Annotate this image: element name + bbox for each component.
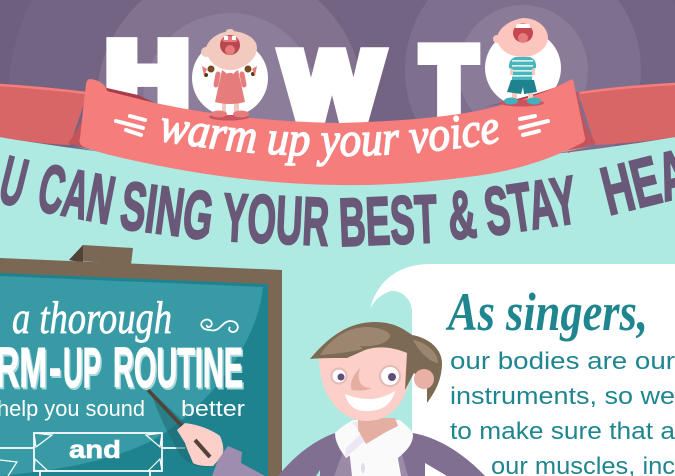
icon: swirl (201, 320, 238, 332)
pointer stick (148, 390, 195, 440)
and banner (0, 433, 185, 476)
board heading: warm-up routine: ROUTINE (113, 336, 243, 400)
speech bubble (370, 264, 675, 476)
ribbon back highlights (0, 84, 675, 93)
curved headline: CAN (32, 150, 120, 239)
pointer end (195, 440, 210, 457)
pointer shadow (150, 390, 212, 467)
shirt (347, 430, 401, 476)
board heading: warm-up routine: UP (63, 336, 101, 400)
ribbon back right (578, 83, 675, 145)
curved headline: STAY (479, 162, 582, 251)
ribbon fold shadows (68, 92, 596, 155)
board heading: a thorough: a thorough (12, 292, 172, 343)
board surface (0, 273, 268, 476)
curved headline: BEST (338, 181, 439, 261)
bubble body text: to make sure that a (450, 418, 675, 445)
bubble body text (450, 348, 675, 476)
header background (0, 0, 675, 322)
ribbon cast shadow (72, 146, 592, 176)
ribbon curl left (90, 83, 155, 103)
title: HOW TO: O (500, 35, 546, 102)
character: boy singing (493, 18, 548, 106)
smile (345, 391, 395, 411)
title: HOW TO: W (283, 33, 382, 140)
board tab (69, 245, 133, 265)
title: HOW TO (106, 23, 561, 140)
board text: better: better (181, 396, 245, 421)
bubble body text: our bodies are our (450, 348, 675, 375)
board heading: warm-up routine: - (49, 336, 61, 400)
teacher body (278, 433, 485, 476)
face (319, 330, 413, 421)
bubble body text: instruments, so we (450, 383, 675, 410)
character: teacher (278, 322, 485, 476)
collar shading (345, 420, 366, 458)
hair highlights (320, 327, 438, 363)
ear (414, 369, 434, 389)
ribbon front (80, 79, 585, 185)
ribbon back left (0, 84, 88, 145)
board heading: warm-up routine (0, 336, 244, 402)
sleeve (212, 446, 265, 476)
speed lines left (116, 116, 145, 135)
collar (335, 420, 413, 458)
board frame (0, 258, 282, 476)
board heading: warm-up routine: - (50, 338, 62, 402)
board heading: warm-up routine: UP (64, 338, 102, 402)
and banner: and (69, 436, 121, 464)
ribbon curl right (480, 80, 572, 108)
waistcoat (334, 447, 408, 476)
hair (310, 322, 442, 403)
hand (177, 423, 223, 466)
mint page background (0, 137, 675, 476)
shirt button (361, 463, 365, 473)
curved headline: YOUR (221, 180, 331, 260)
curved headline: & (444, 176, 479, 254)
title: HOW TO: T (422, 27, 476, 135)
curved headline: SING (116, 168, 218, 255)
board highlight (0, 276, 263, 476)
board heading: warm-up routine: ROUTINE (114, 338, 244, 402)
nose (351, 368, 372, 391)
eyes (332, 366, 400, 386)
board text: help you sound: help you sound (0, 396, 145, 421)
chalkboard (0, 245, 282, 476)
character: girl singing (201, 29, 257, 120)
arm gaps (316, 463, 447, 476)
title: HOW TO: O (207, 45, 253, 112)
title: HOW TO: H (106, 23, 189, 130)
ribbon subtitle: warm up your voice (162, 115, 500, 167)
curved headline (0, 110, 675, 261)
speed lines right (520, 116, 548, 135)
neck (358, 418, 398, 444)
